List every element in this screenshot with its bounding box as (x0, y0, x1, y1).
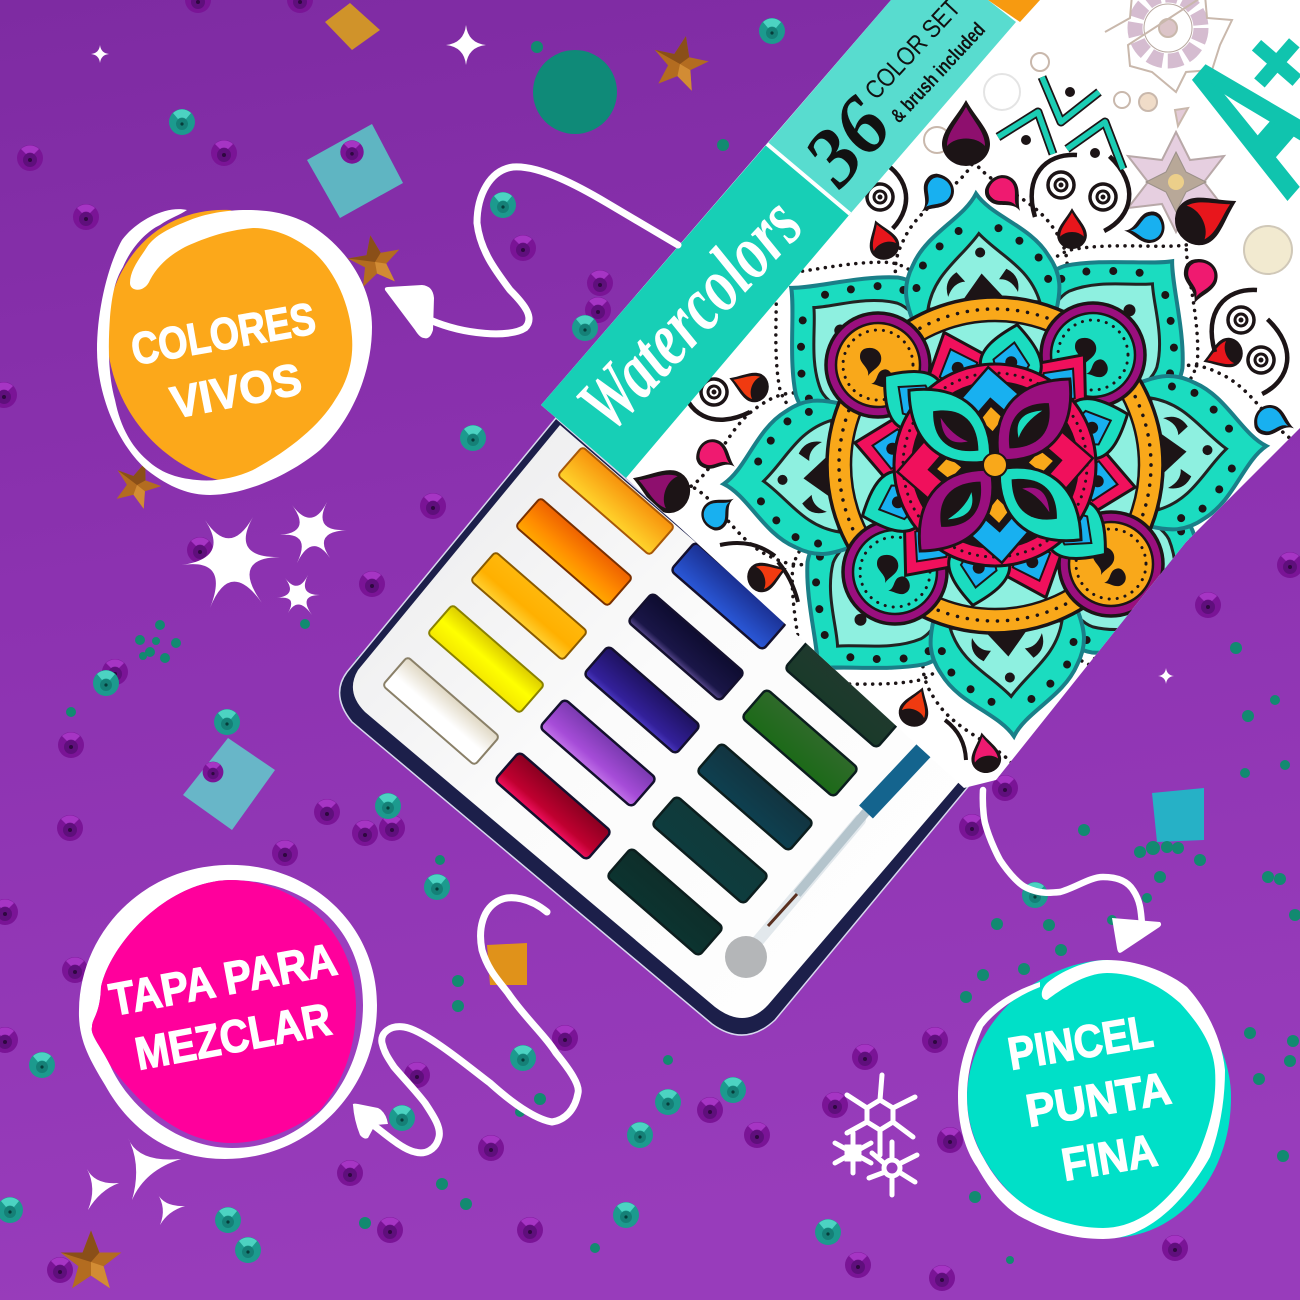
mandala (705, 175, 1285, 755)
callout text: COLORES (127, 292, 319, 375)
orange ring (827, 297, 1163, 633)
white stars near orange callout (182, 502, 347, 615)
watercolors title: Watercolors (559, 180, 819, 447)
faded flower (1128, 132, 1224, 232)
arrow: colores vivos (385, 167, 678, 338)
cardinal chevrons (890, 360, 1100, 570)
white sparkles (87, 25, 1174, 1225)
callout: tapa para mezclar: MEZCLAR (131, 993, 335, 1080)
brush (725, 747, 927, 978)
mandala surrounding ornaments (626, 77, 1300, 775)
36 number: 36 (785, 80, 908, 203)
watercolor tin (340, 418, 972, 1035)
orange tab (988, 0, 1040, 22)
faded background mandala (924, 0, 1292, 274)
tin outer rim (340, 418, 972, 1035)
paint pans: third column (606, 640, 902, 956)
teal strip with Watercolors (541, 144, 850, 478)
outer petals (705, 175, 1285, 755)
callout: colores vivos (97, 209, 372, 495)
arrow: tapa para mezclar (353, 898, 578, 1153)
gold stars (61, 30, 713, 1288)
callout: pincel punta fina: PUNTA (1022, 1062, 1175, 1137)
confetti shapes (183, 3, 1204, 985)
callout: tapa para mezclar (79, 865, 377, 1159)
arrow: pincel punta fina (983, 790, 1161, 953)
callout: pincel punta fina: FINA (1058, 1124, 1161, 1191)
centre flower petals (907, 377, 1083, 553)
centre disc (894, 364, 1096, 566)
lid card (541, 0, 1300, 790)
callout text: TAPA PARA (105, 933, 341, 1026)
mandala dotted outline (670, 140, 1300, 790)
callout: colores vivos: VIVOS (166, 353, 306, 428)
paisley circles (826, 303, 1163, 624)
teal sequins (0, 18, 1048, 1263)
star ring petals (849, 320, 1141, 610)
teal strip with 36 color set (767, 0, 1016, 214)
paint pans: second column (494, 542, 788, 860)
callout: pincel punta fina (958, 960, 1231, 1239)
centre dot (983, 453, 1007, 477)
outlined white stars near teal callout (835, 1075, 917, 1195)
callout text: PINCEL (1004, 1005, 1157, 1080)
paint pans: first column (382, 447, 675, 765)
tin tray (353, 425, 965, 1018)
